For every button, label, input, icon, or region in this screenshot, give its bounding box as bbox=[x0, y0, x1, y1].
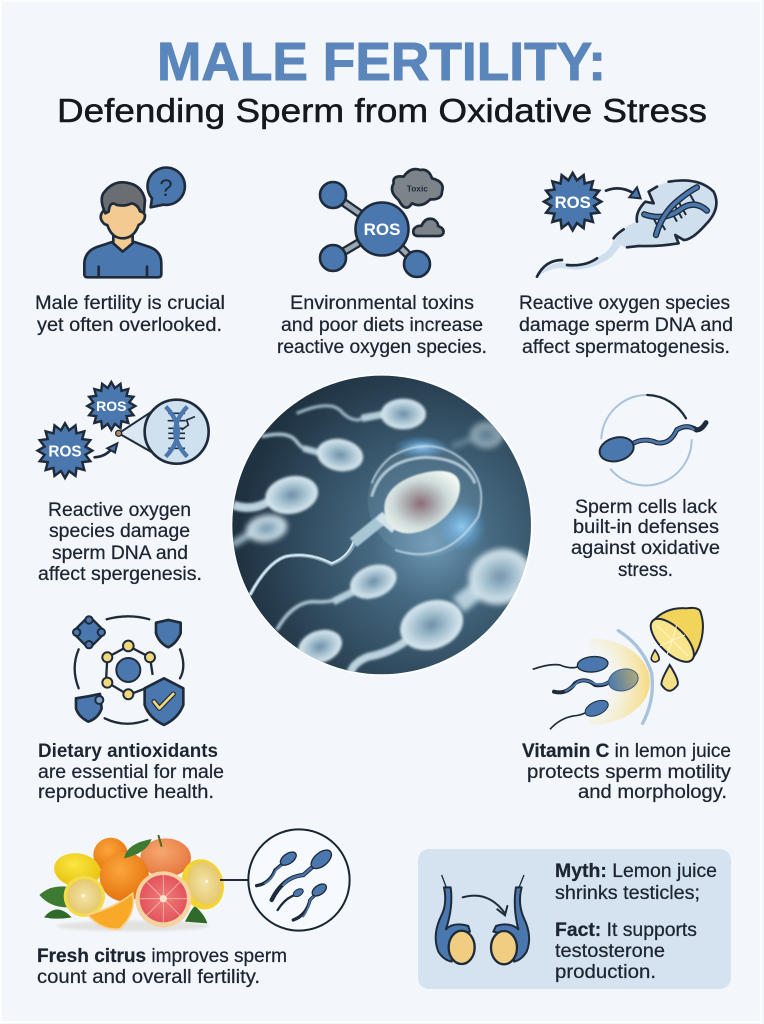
text: ROS spergenesis: Reactive oxygen bbox=[48, 500, 191, 521]
text: myth and fact: production. bbox=[555, 962, 656, 983]
title bbox=[57, 32, 707, 129]
icon: ROS molecule with toxic clouds: ROS bbox=[364, 220, 400, 239]
text: environmental toxins: and poor diets increase bbox=[281, 315, 483, 336]
panel: central sperm photo bbox=[225, 370, 540, 685]
text: sperm cells: stress. bbox=[618, 560, 673, 581]
text: fresh citrus: Fresh citrus improves sperm bbox=[37, 946, 287, 967]
photo ring bbox=[231, 374, 533, 676]
text: myth and fact: testosterone bbox=[555, 941, 665, 962]
title: MALE FERTILITY: bbox=[157, 32, 606, 92]
text: ROS spergenesis: affect spergenesis. bbox=[38, 564, 202, 585]
icon: sperm in broken circle bbox=[597, 395, 706, 485]
panel: fresh citrus bbox=[37, 829, 350, 988]
connector line bbox=[220, 879, 250, 881]
text: ROS damage: damage sperm DNA and bbox=[519, 315, 733, 336]
text: dietary antioxidants bbox=[38, 741, 224, 803]
text: ROS spergenesis: sperm DNA and bbox=[52, 543, 188, 564]
panel: vitamin C lemon bbox=[522, 608, 732, 803]
text: vitamin C bbox=[522, 741, 732, 803]
icon: ROS stars and DNA magnifier bbox=[38, 382, 209, 478]
text: ROS damage bbox=[519, 293, 733, 358]
text: sperm cells bbox=[571, 497, 720, 581]
icon: ROS attacking sperm: ROS bbox=[555, 193, 591, 212]
text: fresh citrus bbox=[37, 946, 287, 988]
text: sperm cells: built-in defenses bbox=[573, 517, 719, 538]
text: dietary antioxidants: reproductive health. bbox=[38, 782, 214, 803]
text: sperm cells: against oxidative bbox=[571, 538, 720, 559]
text: ROS spergenesis bbox=[38, 500, 202, 585]
panel: sperm lacks defenses bbox=[571, 395, 720, 581]
text: male fertility: yet often overlooked. bbox=[37, 315, 222, 336]
text: vitamin C: and morphology. bbox=[578, 782, 727, 803]
title: Defending Sperm from Oxidative Stress bbox=[57, 92, 707, 129]
panel: ROS damage sperm DNA bbox=[519, 173, 733, 358]
text: male fertility: Male fertility is crucial bbox=[35, 293, 225, 314]
icon: ROS stars and DNA magnifier: ROS bbox=[96, 398, 126, 414]
icon: ROS molecule with toxic clouds: Toxic bbox=[407, 184, 428, 194]
box background bbox=[418, 849, 731, 989]
text: ROS damage: Reactive oxygen species bbox=[519, 293, 730, 314]
icon: man with question bubble: ? bbox=[159, 175, 173, 202]
text: sperm cells: Sperm cells lack bbox=[575, 497, 718, 518]
text: fresh citrus: count and overall fertility. bbox=[37, 967, 260, 988]
icon: ROS molecule with toxic clouds bbox=[320, 169, 444, 277]
text: vitamin C: protects sperm motility bbox=[527, 762, 732, 783]
icon: sperm in circle bbox=[248, 829, 350, 931]
text: environmental toxins: Environmental toxins bbox=[290, 293, 474, 314]
text: vitamin C: Vitamin C in lemon juice bbox=[522, 741, 731, 762]
text: environmental toxins bbox=[277, 293, 487, 358]
icon: antioxidant shields bbox=[72, 616, 183, 725]
panel: dietary antioxidants bbox=[38, 616, 224, 803]
panel: myth and fact bbox=[418, 849, 731, 989]
text: dietary antioxidants: are essential for male bbox=[38, 762, 224, 783]
icon: citrus fruit pile bbox=[39, 835, 229, 931]
panel: ROS affect spergenesis bbox=[38, 382, 209, 585]
icon: ROS attacking sperm bbox=[537, 173, 717, 277]
icon: ROS stars and DNA magnifier: ROS bbox=[48, 444, 82, 461]
text: ROS spergenesis: species damage bbox=[49, 521, 190, 542]
text: male fertility bbox=[35, 293, 225, 336]
sperm illustration bbox=[225, 370, 540, 685]
icon: man with question bubble bbox=[84, 168, 185, 277]
icon: lemon protecting sperm bbox=[533, 608, 703, 729]
text: myth and fact bbox=[555, 861, 717, 983]
text: ROS damage: affect spermatogenesis. bbox=[522, 337, 730, 358]
text: dietary antioxidants: Dietary antioxidants bbox=[38, 741, 218, 762]
text: myth and fact: Fact: It supports bbox=[555, 920, 697, 941]
icon: testicles with arrow bbox=[436, 875, 529, 964]
panel: male fertility overlooked bbox=[35, 168, 225, 336]
text: environmental toxins: reactive oxygen species. bbox=[277, 337, 487, 358]
panel: environmental toxins bbox=[277, 169, 487, 358]
text: myth and fact: Myth: Lemon juice bbox=[555, 861, 717, 882]
text: myth and fact: shrinks testicles; bbox=[555, 883, 700, 904]
